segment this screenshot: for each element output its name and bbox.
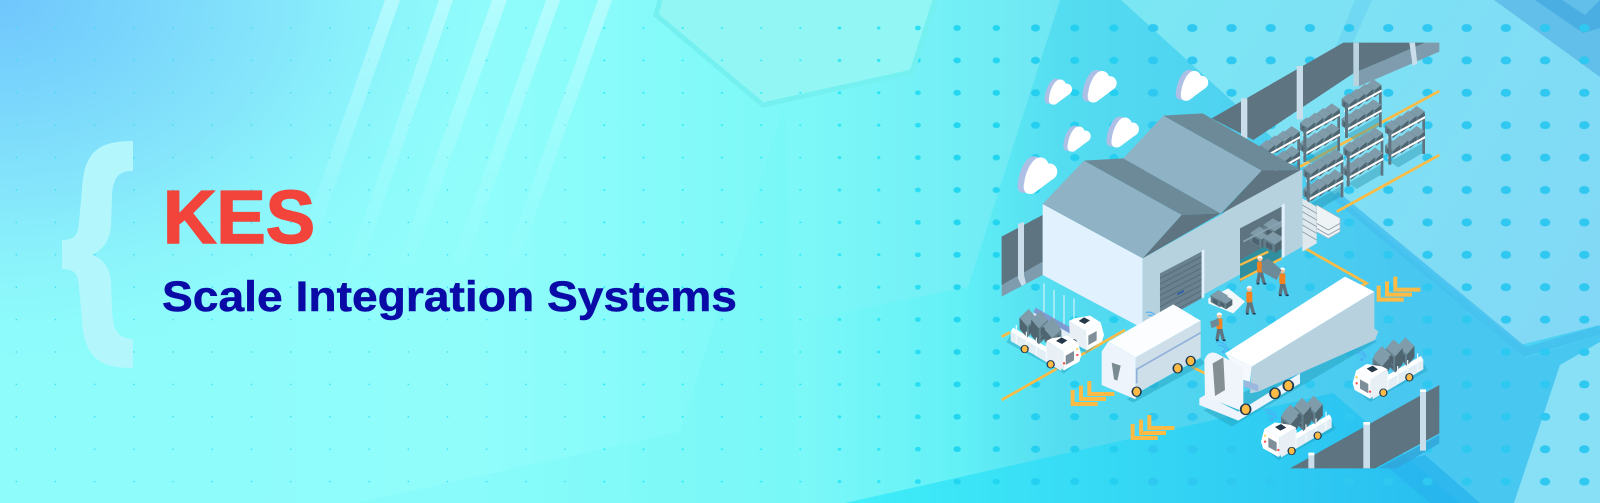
rear left cart xyxy=(1029,283,1104,354)
workers xyxy=(1210,256,1289,340)
decorative diagonal stripes xyxy=(290,0,612,285)
subtitle: Scale Integration Systems xyxy=(162,273,737,321)
warehouse building xyxy=(1043,113,1302,328)
large white truck xyxy=(1199,277,1378,427)
wifi signals xyxy=(1146,312,1366,420)
storage racks xyxy=(1260,79,1425,211)
left wall xyxy=(1002,215,1043,297)
small white truck xyxy=(1102,304,1205,403)
front right cart xyxy=(1353,337,1428,402)
illustration: isometric warehouse xyxy=(1002,43,1439,468)
hexagon outline xyxy=(656,0,935,105)
title: KES xyxy=(163,175,315,259)
small pallet robot xyxy=(1208,288,1245,313)
floor lines xyxy=(1002,91,1439,400)
front left cart xyxy=(1006,309,1081,374)
back wall xyxy=(1212,43,1439,140)
bottom cart xyxy=(1261,396,1336,460)
front wall xyxy=(1290,385,1439,468)
clouds xyxy=(1017,70,1208,194)
pallet stacks xyxy=(1302,198,1340,252)
curly brace xyxy=(62,141,133,368)
chevron arrows xyxy=(1073,277,1420,438)
